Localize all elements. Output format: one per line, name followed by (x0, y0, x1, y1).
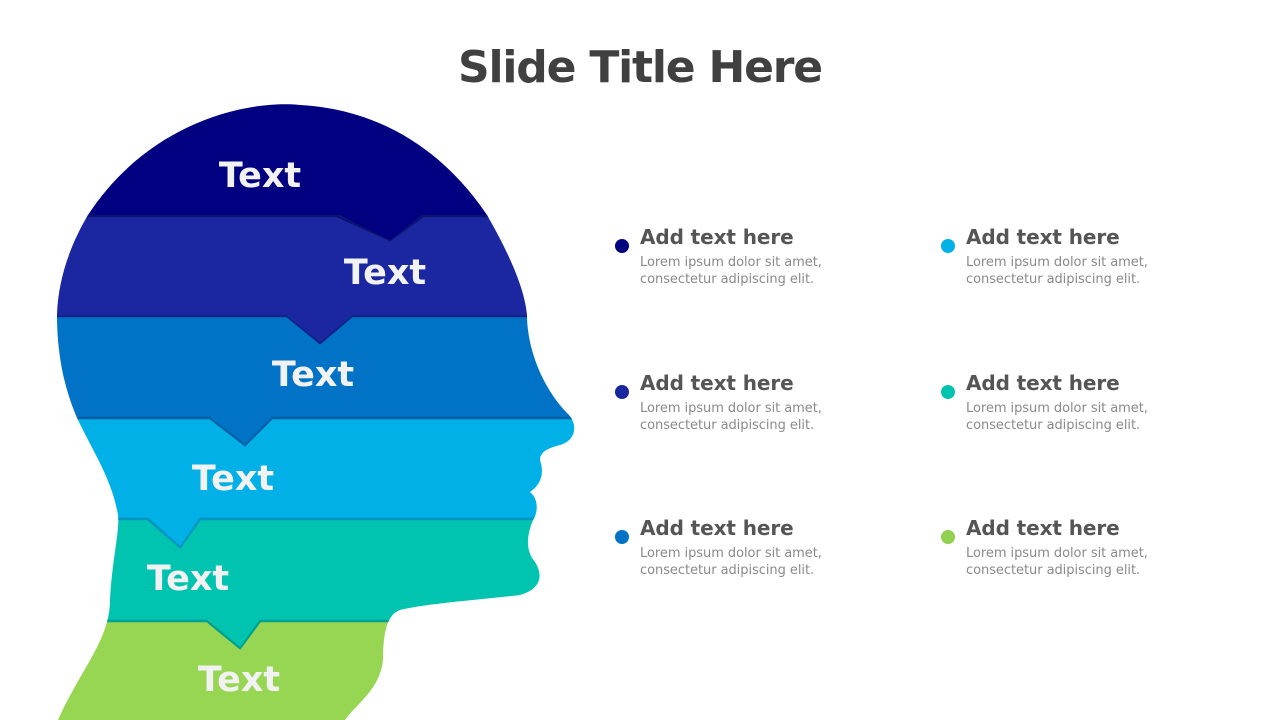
item 3: Add text here (640, 516, 794, 540)
item 1: consectetur adipiscing elit. (640, 272, 814, 287)
item 5: consectetur adipiscing elit. (966, 418, 1140, 433)
item 3: consectetur adipiscing elit. (640, 563, 814, 578)
item 6 (941, 516, 1148, 578)
label 5: Text (147, 559, 229, 599)
item 4 (941, 225, 1148, 287)
label 6: Text (198, 660, 280, 700)
item 6: consectetur adipiscing elit. (966, 563, 1140, 578)
item 6: Add text here (966, 516, 1120, 540)
item 5: Lorem ipsum dolor sit amet, (966, 401, 1148, 416)
label 2: Text (344, 253, 426, 293)
item 2: Add text here (640, 371, 794, 395)
title: Slide Title Here (458, 42, 822, 93)
item 3: Lorem ipsum dolor sit amet, (640, 546, 822, 561)
item 2: Lorem ipsum dolor sit amet, (640, 401, 822, 416)
item 2 (615, 371, 822, 433)
item 1: Lorem ipsum dolor sit amet, (640, 255, 822, 270)
label 1: Text (219, 156, 301, 196)
item 1 (615, 225, 822, 287)
item 5: Add text here (966, 371, 1120, 395)
item 6: Lorem ipsum dolor sit amet, (966, 546, 1148, 561)
item 4: consectetur adipiscing elit. (966, 272, 1140, 287)
label 4: Text (192, 459, 274, 499)
item 5 (941, 371, 1148, 433)
label 3: Text (272, 355, 354, 395)
item 4: Add text here (966, 225, 1120, 249)
item 4: Lorem ipsum dolor sit amet, (966, 255, 1148, 270)
head diagram (57, 104, 574, 720)
item 1: Add text here (640, 225, 794, 249)
item 2: consectetur adipiscing elit. (640, 418, 814, 433)
item 3 (615, 516, 822, 578)
